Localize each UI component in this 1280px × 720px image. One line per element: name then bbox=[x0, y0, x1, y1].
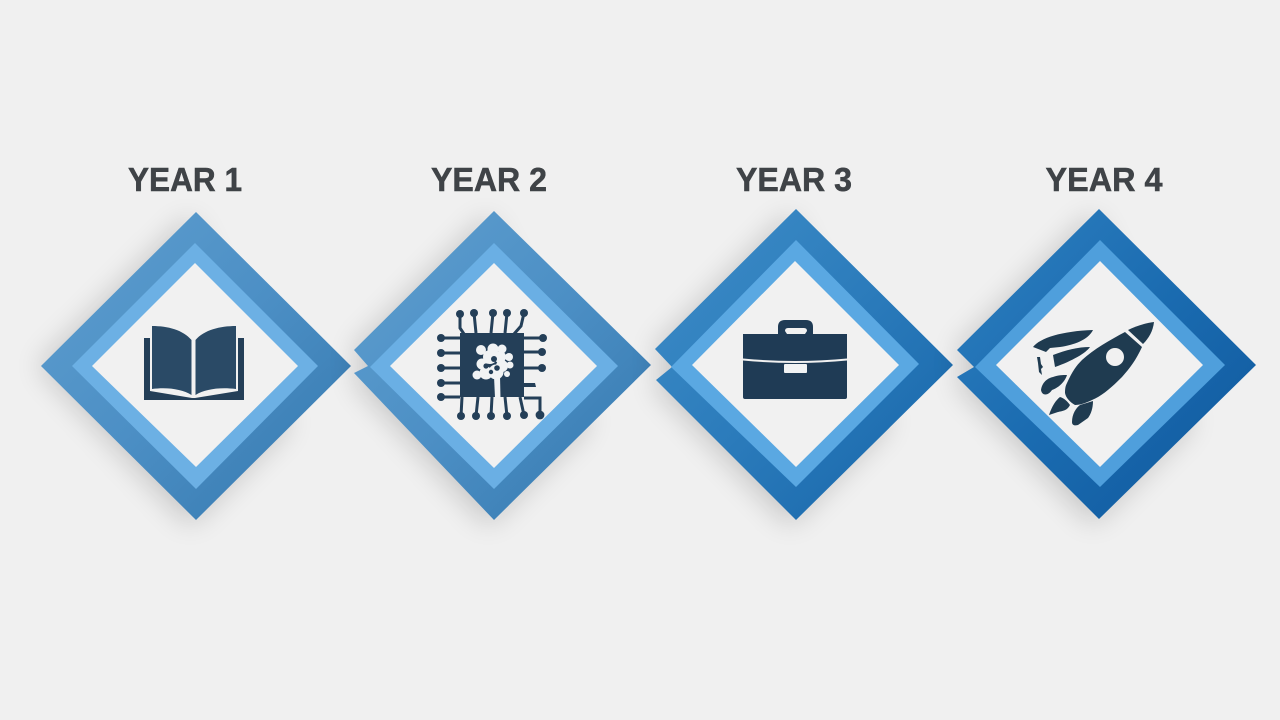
panel: year 1 bbox=[38, 161, 351, 526]
heading: year 3: YEAR 3 bbox=[736, 161, 852, 198]
icon: briefcase bbox=[743, 320, 847, 399]
heading: year 2: YEAR 2 bbox=[431, 161, 547, 198]
icon detail: tree bbox=[472, 344, 514, 398]
heading: year 4: YEAR 4 bbox=[1046, 161, 1163, 198]
icon: open book bbox=[144, 326, 244, 400]
diamond: year 4 bbox=[954, 209, 1256, 525]
icon: rocket bbox=[1033, 322, 1154, 425]
panel: year 4 bbox=[954, 161, 1256, 525]
icon: circuit chip with tree bbox=[437, 309, 547, 420]
diamond: year 3 bbox=[652, 209, 953, 526]
panel: year 3 bbox=[652, 161, 953, 526]
diamond: year 1 bbox=[38, 212, 351, 526]
heading: year 1: YEAR 1 bbox=[128, 161, 242, 198]
panel: year 2 bbox=[351, 161, 651, 526]
diamond: year 2 bbox=[351, 211, 651, 526]
